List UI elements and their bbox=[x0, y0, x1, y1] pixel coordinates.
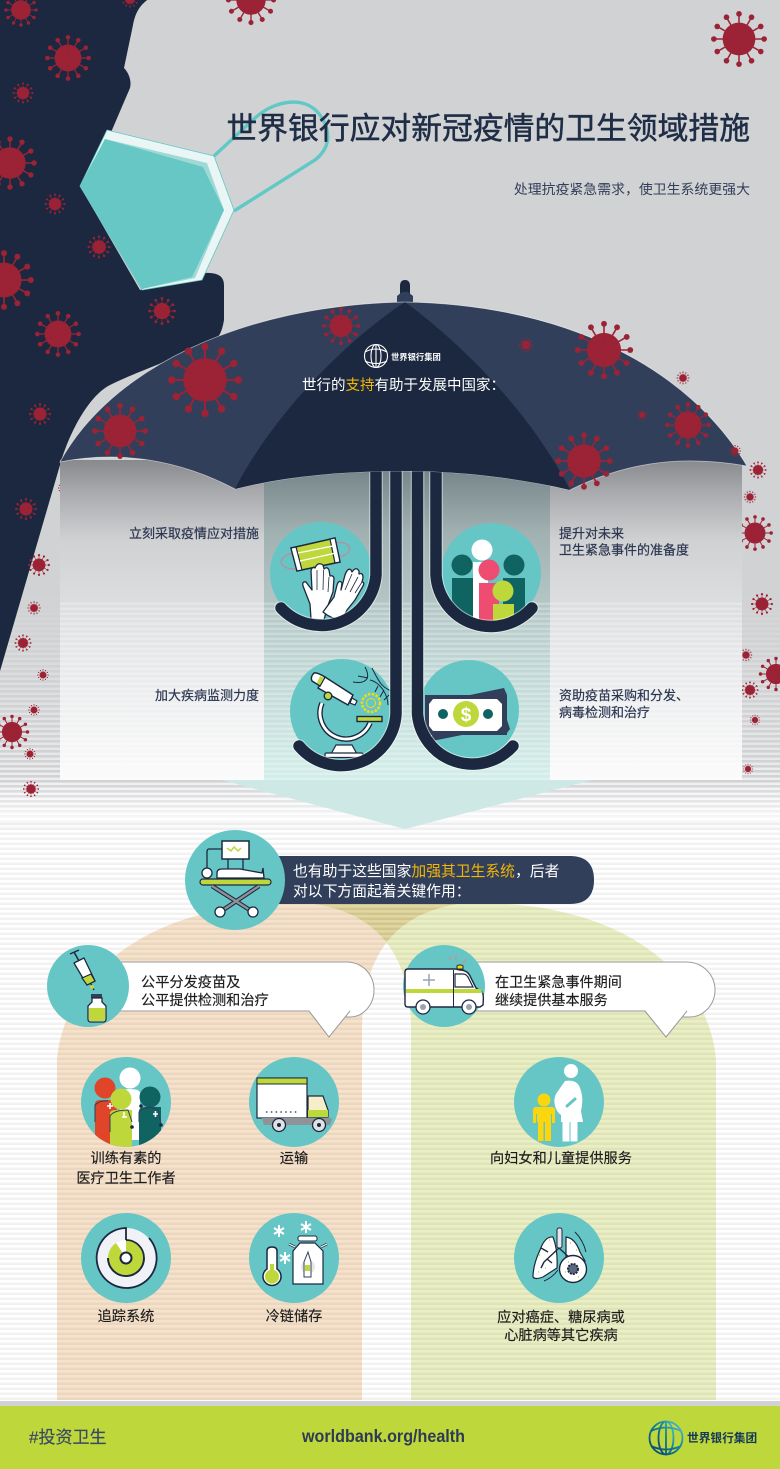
label: tracking system: 追踪系统 bbox=[98, 1309, 154, 1325]
label: trained health workers: 医疗卫生工作者 bbox=[76, 1171, 176, 1187]
mask straps bbox=[214, 102, 328, 211]
hashtag: #投资卫生 bbox=[29, 1428, 106, 1447]
umbrella statement: 世行的支持有助于发展中国家： bbox=[302, 377, 505, 394]
icon circle: money bills: $ bbox=[461, 705, 472, 726]
panel: gradient under umbrella bbox=[60, 460, 742, 829]
icon circle: hospital bed bbox=[185, 830, 285, 930]
World Bank logo in footer bbox=[650, 1422, 757, 1454]
World Bank logo on umbrella: 世界银行集团 bbox=[391, 352, 441, 362]
viruses on umbrella bbox=[92, 307, 741, 490]
bubble: essential services: 继续提供基本服务 bbox=[495, 992, 608, 1008]
bubble: equitable vaccine distribution: 公平分发疫苗及 bbox=[141, 975, 240, 991]
World Bank logo on umbrella bbox=[364, 344, 441, 368]
banner: 也有助于这些国家加强其卫生系统，后者 bbox=[293, 864, 559, 880]
label: preparedness: 提升对未来 bbox=[559, 526, 624, 541]
label: cancer diabetes heart disease: 心脏病等其它疾病 bbox=[504, 1327, 618, 1344]
icon circle: people group bbox=[441, 523, 541, 630]
icon circle: mother and child bbox=[514, 1057, 604, 1147]
icon circle: truck bbox=[249, 1057, 339, 1147]
bubble: equitable vaccine distribution: 公平提供检测和治疗 bbox=[141, 993, 269, 1009]
icon circle: cold chain bbox=[249, 1213, 339, 1303]
umbrella handles bbox=[281, 450, 532, 766]
bubble: equitable vaccine distribution bbox=[100, 962, 374, 1037]
footer bbox=[0, 1401, 780, 1469]
World Bank logo in footer: 世界银行集团 bbox=[687, 1431, 757, 1445]
label: cancer diabetes heart disease: 应对癌症、糖尿病或 bbox=[497, 1310, 625, 1326]
subtitle: 处理抗疫紧急需求，使卫生系统更强大 bbox=[514, 181, 750, 197]
label: women and children services: 向妇女和儿童提供服务 bbox=[490, 1150, 632, 1167]
icon circle: lungs bbox=[514, 1213, 604, 1303]
banner: 对以下方面起着关键作用： bbox=[293, 883, 471, 900]
label: cold chain storage: 冷链储存 bbox=[266, 1309, 322, 1325]
icon circle: health workers bbox=[81, 1057, 171, 1150]
umbrella bbox=[60, 280, 747, 490]
label: immediate response: 立刻采取疫情应对措施 bbox=[129, 526, 259, 541]
label: surveillance: 加大疾病监测力度 bbox=[155, 688, 259, 703]
bubble: essential services: 在卫生紧急事件期间 bbox=[495, 974, 622, 990]
label: vaccine procurement: 资助疫苗采购和分发、 bbox=[559, 688, 689, 703]
title: 世界银行应对新冠疫情的卫生领域措施 bbox=[226, 111, 750, 146]
label: preparedness: 卫生紧急事件的准备度 bbox=[559, 542, 689, 558]
label: transport: 运输 bbox=[280, 1151, 308, 1167]
panels: peach and green regions bbox=[57, 900, 716, 1400]
icon circle: syringe and vial bbox=[47, 945, 129, 1027]
icon circle: money bills bbox=[419, 660, 519, 760]
footer link: worldbank.org/health bbox=[301, 1426, 465, 1446]
icon circle: masks and gloves bbox=[270, 522, 372, 624]
icon circle: tracking system bbox=[81, 1213, 171, 1303]
banner bbox=[270, 856, 594, 904]
label: trained health workers: 训练有素的 bbox=[91, 1151, 161, 1167]
icon circle: microscope and DNA bbox=[290, 659, 396, 763]
bubble: essential services bbox=[460, 962, 715, 1037]
label: vaccine procurement: 病毒检测和治疗 bbox=[559, 705, 650, 720]
virus particles behind umbrella bbox=[0, 0, 780, 797]
face mask bbox=[80, 130, 234, 290]
silhouette of head wearing mask bbox=[0, 0, 224, 678]
icon circle: ambulance bbox=[403, 945, 485, 1027]
